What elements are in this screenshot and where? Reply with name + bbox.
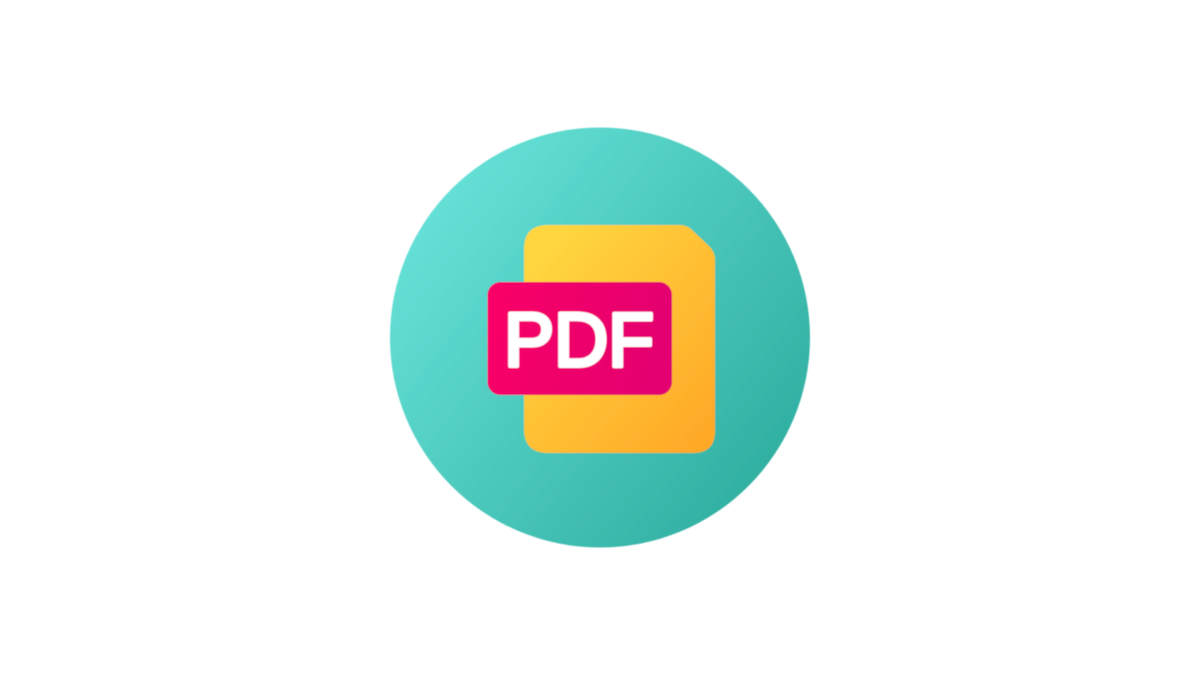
PDF label badge	[488, 282, 672, 395]
badge text: PDF	[504, 298, 654, 383]
icon: PDF file badge	[390, 128, 810, 548]
badge background	[488, 282, 672, 395]
icon background circle	[390, 128, 810, 548]
icon: document page with clipped corner	[524, 225, 715, 453]
